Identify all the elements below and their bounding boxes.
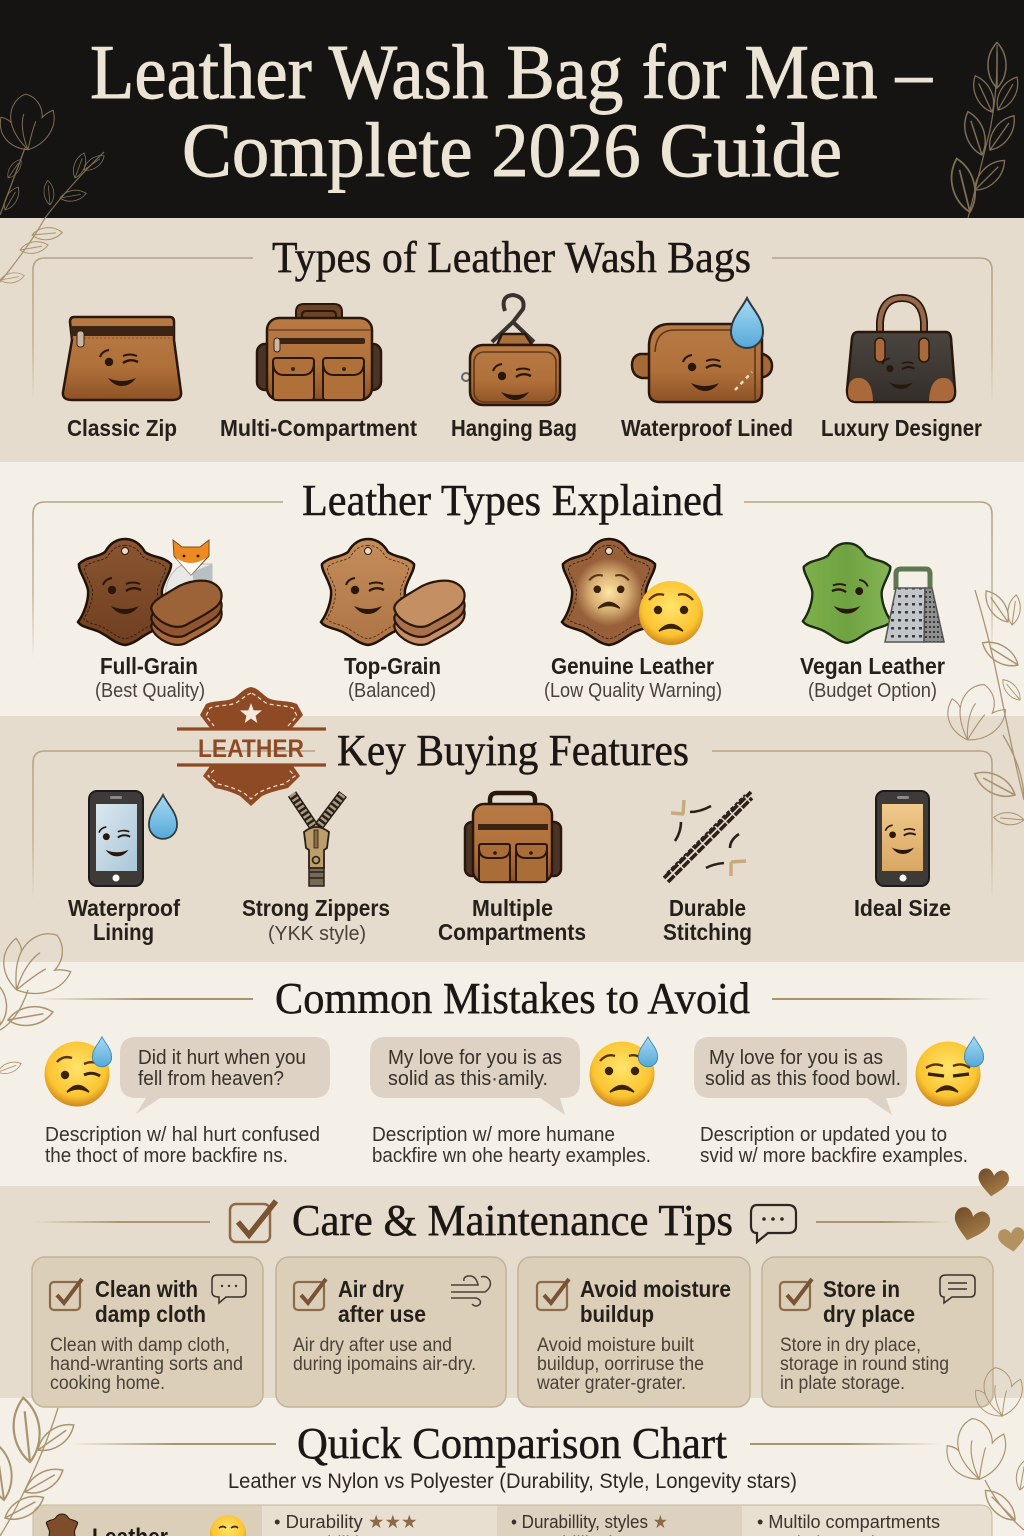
emoji: leather row: [210, 1515, 246, 1536]
card: air dry after use: after use: [338, 1301, 426, 1327]
card: air dry after use: [276, 1257, 506, 1407]
cell: multi compartments: • Multilo compartments: [757, 1511, 940, 1532]
card: avoid moisture buildup: buildup, oorriruse the: [537, 1354, 704, 1375]
card: store in dry place: dry place: [823, 1301, 915, 1327]
icon: multiple compartments bag: [465, 793, 561, 882]
icon: multi-compartment bag: [257, 304, 381, 400]
card: avoid moisture buildup: water grater-grater.: [536, 1373, 686, 1394]
card: clean with damp cloth: hand-wranting sorts and: [50, 1354, 243, 1375]
icon: genuine leather hide with worried emoji: [562, 539, 703, 645]
text: mistake description 3: svid w/ more backfire examples.: [700, 1145, 968, 1167]
card: store in dry place: Store in dry place,: [780, 1335, 921, 1356]
text: mistake description 3: [700, 1124, 968, 1167]
decoration: top-left floral: [0, 92, 107, 218]
label: full-grain: (Best Quality): [95, 680, 205, 702]
panel: leather types explained: [0, 462, 1024, 716]
panel: care and maintenance tips: [0, 1186, 1024, 1407]
title: [90, 29, 933, 193]
card: clean with damp cloth: Clean with damp cloth,: [50, 1335, 230, 1356]
icon: waterproof lined bag: [632, 298, 772, 402]
icon: vegan leather hide with grater: [803, 543, 944, 643]
label: vegan leather: Vegan Leather: [800, 653, 945, 679]
emoji: sweating face 3: [916, 1037, 984, 1106]
icon: wind: [451, 1276, 490, 1306]
cell: durability and styles: • Durabillity, styles ★: [511, 1511, 668, 1532]
panel: common mistakes to avoid: [0, 962, 1024, 1186]
callout: speech bubble 3: My love for you is as: [709, 1047, 883, 1069]
label: genuine leather: (Low Quality Warning): [544, 680, 722, 702]
icon: classic zip bag: [63, 317, 181, 400]
label: waterproof lining: Lining: [93, 919, 154, 945]
label: leather: LEATHER: [198, 735, 304, 763]
card: clean with damp cloth: [32, 1257, 263, 1407]
card: air dry after use: during ipomains air-dry.: [293, 1354, 476, 1375]
label: full-grain: [95, 653, 205, 702]
card: avoid moisture buildup: Avoid moisture: [580, 1276, 731, 1302]
icon: chat: [212, 1275, 246, 1303]
callout: speech bubble 2: [370, 1037, 580, 1115]
callout: speech bubble 3: solid as this food bowl.: [705, 1068, 901, 1090]
label: vegan leather: (Budget Option): [808, 680, 937, 702]
decoration: upper-left section floral: [0, 218, 63, 285]
card: air dry after use: Air dry after use and: [293, 1335, 452, 1356]
decoration: bottom-left floral: [0, 1396, 79, 1536]
card: store in dry place: storage in round sting: [780, 1354, 949, 1375]
text: mistake description 1: the thoct of more backfire ns.: [45, 1145, 288, 1167]
heading: care and maintenance: Care & Maintenance Tips: [292, 1196, 733, 1245]
decoration: hearts: [950, 1167, 1024, 1253]
label: ideal size: Ideal Size: [854, 895, 951, 921]
heading: leather types: Leather Types Explained: [302, 476, 723, 525]
label: genuine leather: Genuine Leather: [551, 653, 714, 679]
label: top-grain: [344, 653, 441, 702]
icon: large checkbox: [230, 1201, 276, 1242]
label: multiple compartments: Compartments: [438, 919, 586, 945]
callout: speech bubble 1: [120, 1037, 330, 1114]
comparison table: [33, 1505, 992, 1536]
label: classic zip: Classic Zip: [67, 415, 177, 441]
heading: key buying features: Key Buying Features: [337, 726, 689, 775]
badge: leather emblem: [177, 687, 326, 806]
cell: durability stars: • Durability ★★★: [274, 1511, 418, 1532]
panel: quick comparison chart: [0, 1398, 1024, 1536]
heading: quick comparison: Quick Comparison Chart: [297, 1419, 727, 1468]
text: mistake description 2: Description w/ more humane: [372, 1124, 615, 1146]
header banner: [0, 0, 1024, 218]
label: strong zippers: Strong Zippers: [242, 895, 390, 921]
panel: types of leather wash bags: [0, 218, 1024, 462]
label: multi-compartment: Multi-Compartment: [220, 415, 417, 441]
subtitle: Leather vs Nylon vs Polyester (Durability, Style, Longevity stars): [228, 1470, 797, 1493]
text: mistake description 2: backfire wn ohe hearty examples.: [372, 1145, 651, 1167]
heading: types: Types of Leather Wash Bags: [272, 233, 751, 282]
heading: common mistakes: Common Mistakes to Avoid: [275, 974, 750, 1023]
label: full-grain: Full-Grain: [100, 653, 198, 679]
icon: luxury designer bag: [847, 298, 955, 402]
card: store in dry place: in plate storage.: [780, 1373, 905, 1394]
card: clean with damp cloth: cooking home.: [50, 1373, 165, 1394]
text: mistake description 1: [45, 1124, 320, 1167]
card: store in dry place: Store in: [823, 1276, 900, 1302]
label: durable stitching: Durable: [669, 895, 746, 921]
title: Complete 2026 Guide: [182, 107, 842, 193]
card: avoid moisture buildup: [518, 1257, 750, 1407]
icon: strong zipper: [292, 794, 343, 886]
label: strong zippers: [242, 895, 390, 945]
label: hanging bag: Hanging Bag: [451, 415, 577, 441]
text: mistake description 3: Description or updated you to: [700, 1124, 947, 1146]
label: multiple compartments: [438, 895, 586, 945]
panel: key buying features: [0, 716, 1024, 962]
icon: waterproof phone: [89, 791, 177, 886]
label: genuine leather: [544, 653, 722, 702]
label: top-grain: Top-Grain: [344, 653, 441, 679]
icon: full-grain hide with fox: [78, 539, 222, 645]
label: top-grain: (Balanced): [348, 680, 436, 702]
icon: durable stitching: [664, 792, 752, 882]
icon: top-grain hide: [321, 539, 465, 645]
text: mistake description 2: [372, 1124, 651, 1167]
label: waterproof lining: [68, 895, 180, 945]
label: vegan leather: [800, 653, 945, 702]
label: waterproof lined: Waterproof Lined: [621, 415, 793, 441]
label: durable stitching: [663, 895, 752, 945]
card: clean with damp cloth: Clean with: [95, 1276, 198, 1302]
decoration: right side floral: [942, 587, 1024, 826]
emoji: sweating face 1: [44, 1037, 112, 1106]
decoration: left side floral: [0, 916, 84, 1077]
icon: chat bubble: [751, 1205, 796, 1242]
label: durable stitching: Stitching: [663, 919, 752, 945]
callout: speech bubble 2: solid as this·amily.: [388, 1068, 548, 1090]
label: luxury designer: Luxury Designer: [821, 415, 982, 441]
title: Leather Wash Bag for Men –: [90, 29, 933, 115]
callout: speech bubble 1: Did it hurt when you: [138, 1047, 306, 1069]
label: multiple compartments: Multiple: [472, 895, 553, 921]
callout: speech bubble 2: My love for you is as: [388, 1047, 562, 1069]
decoration: top-right floral: [946, 42, 1024, 218]
icon: leather hide: [46, 1514, 78, 1536]
callout: speech bubble 1: fell from heaven?: [138, 1068, 284, 1090]
decoration: bottom-right floral: [943, 1364, 1024, 1530]
label: strong zippers: (YKK style): [268, 923, 366, 945]
card: store in dry place: [762, 1257, 993, 1407]
card: clean with damp cloth: damp cloth: [95, 1301, 206, 1327]
emoji: sweating face 2: [590, 1037, 658, 1106]
card: avoid moisture buildup: buildup: [580, 1301, 654, 1327]
icon: message: [940, 1275, 975, 1303]
text: mistake description 1: Description w/ hal hurt confused: [45, 1124, 320, 1146]
callout: speech bubble 3: [694, 1037, 907, 1115]
label: waterproof lining: Waterproof: [68, 895, 180, 921]
icon: hanging bag: [462, 295, 560, 405]
icon: ideal size phone: [876, 791, 929, 886]
card: avoid moisture buildup: Avoid moisture built: [537, 1335, 695, 1356]
card: air dry after use: Air dry: [338, 1276, 404, 1302]
